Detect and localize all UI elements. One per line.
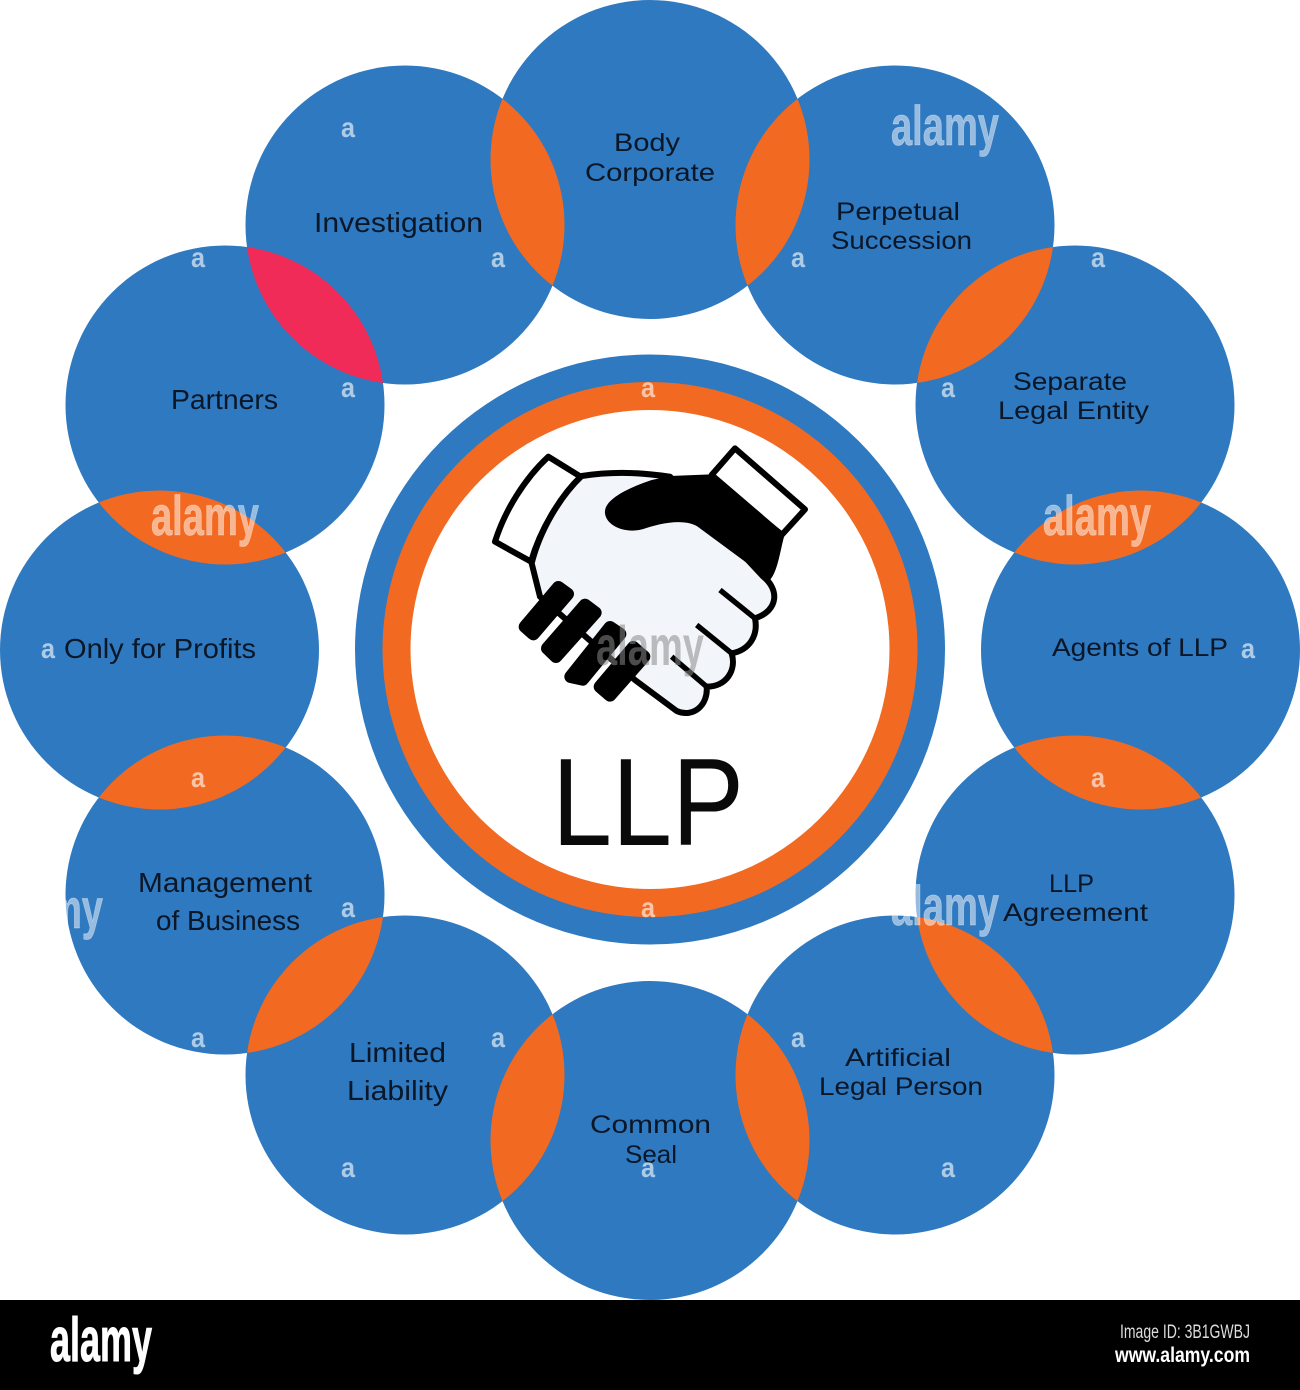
watermark: small repeated marks: a (941, 372, 955, 403)
watermark: small repeated marks: a (341, 372, 355, 403)
label: Management of Business: of Business (156, 905, 300, 936)
label: Common Seal (590, 1111, 711, 1169)
watermark: small repeated marks: a (341, 1152, 355, 1183)
watermark: small repeated marks: a (791, 242, 805, 273)
label: Management of Business (138, 867, 312, 936)
label: Management of Business: Management (138, 867, 312, 898)
label: Body Corporate: Corporate (585, 159, 715, 187)
label: Artificial Legal Person (819, 1044, 983, 1101)
watermark: large alamy marks: alamy (891, 874, 999, 937)
watermark: small repeated marks: a (191, 762, 205, 793)
orange overlap lenses (98, 98, 1202, 1201)
central title: LLP: LLP (552, 734, 744, 872)
watermark: large alamy marks: alamy (1043, 484, 1151, 547)
watermark: large alamy marks: alamy (151, 484, 259, 547)
label: Separate Legal Entity: Separate (1013, 368, 1127, 396)
label: Common Seal: Common (590, 1111, 711, 1139)
label: LLP Agreement: LLP (1049, 870, 1094, 898)
label: Artificial Legal Person: Legal Person (819, 1073, 983, 1101)
watermark: small repeated marks: a (191, 242, 205, 273)
label: Perpetual Succession (831, 198, 972, 255)
label: LLP Agreement (1003, 870, 1148, 927)
label: Body Corporate: Body (614, 129, 681, 157)
watermark: small repeated marks: a (1091, 762, 1105, 793)
footer url: www.alamy.com (1114, 1344, 1250, 1367)
label: Perpetual Succession: Succession (831, 227, 972, 255)
watermark: large alamy marks (0, 94, 1151, 940)
label: Body Corporate (585, 129, 715, 187)
label: Limited Liability: Liability (347, 1075, 448, 1106)
label: Separate Legal Entity: Legal Entity (998, 397, 1150, 425)
watermark: small repeated marks: a (1241, 633, 1255, 664)
watermark: large alamy marks: alamy (596, 614, 704, 677)
watermark: small repeated marks: a (41, 633, 55, 664)
footer logo: alamy (50, 1306, 152, 1375)
label: Artificial Legal Person: Artificial (845, 1044, 951, 1072)
central medallion rings (355, 354, 945, 944)
footer image id: Image ID: 3B1GWBJ (1120, 1322, 1250, 1343)
label: LLP Agreement: Agreement (1003, 899, 1148, 927)
pink overlap lens: Partners and Investigation (247, 247, 383, 383)
label: Limited Liability: Limited (349, 1037, 446, 1068)
label: Common Seal: Seal (625, 1141, 677, 1169)
label: Separate Legal Entity (998, 368, 1150, 425)
watermark: small repeated marks: a (491, 1022, 505, 1053)
watermark: small repeated marks: a (941, 1152, 955, 1183)
watermark: small repeated marks: a (341, 892, 355, 923)
label: Perpetual Succession: Perpetual (836, 198, 960, 226)
watermark: small repeated marks: a (641, 1152, 655, 1183)
watermark: small repeated marks: a (1091, 242, 1105, 273)
label: Limited Liability (347, 1037, 448, 1106)
watermark: small repeated marks (41, 112, 1255, 1183)
watermark: small repeated marks: a (341, 112, 355, 143)
footer bar (0, 1300, 1300, 1390)
label: Only for Profits: Only for Profits (64, 633, 256, 664)
label: Partners: Partners (171, 384, 278, 415)
watermark: small repeated marks: a (641, 372, 655, 403)
watermark: small repeated marks: a (641, 892, 655, 923)
icon: handshake (495, 448, 805, 713)
label: Investigation: Investigation (314, 207, 483, 238)
watermark: small repeated marks: a (791, 1022, 805, 1053)
watermark: small repeated marks: a (491, 242, 505, 273)
label: Agents of LLP: Agents of LLP (1052, 634, 1228, 662)
watermark: small repeated marks: a (191, 1022, 205, 1053)
watermark: large alamy marks: alamy (891, 94, 999, 157)
